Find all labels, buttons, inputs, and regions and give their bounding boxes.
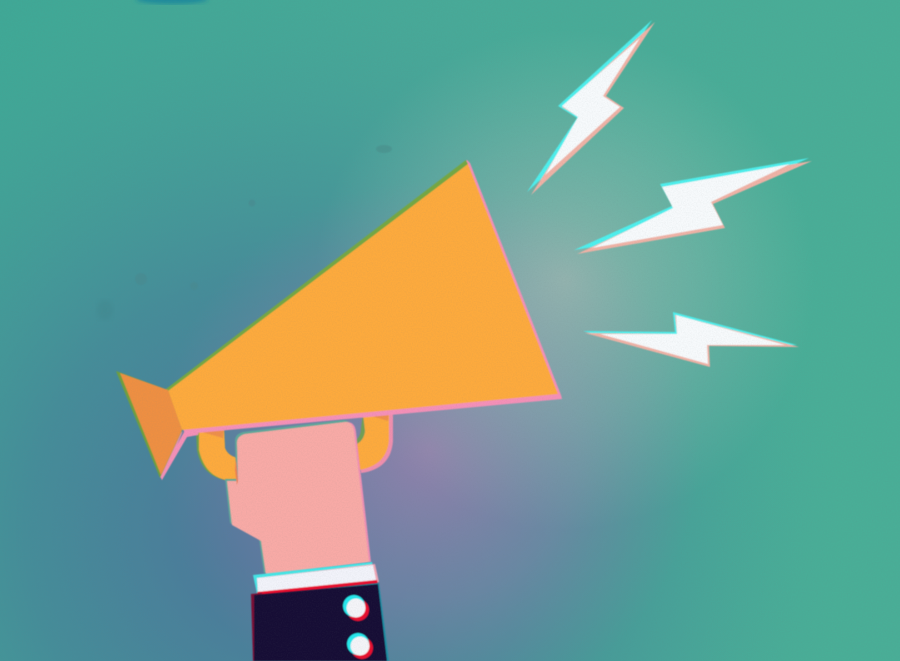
handle: left grip <box>196 427 238 481</box>
lightning bolt: middle <box>574 158 812 254</box>
shirt cuff <box>253 562 379 596</box>
button: lower cuff button <box>347 633 373 659</box>
lightning bolt: bottom <box>583 312 799 367</box>
hand <box>225 420 371 575</box>
megaphone cone <box>166 160 562 434</box>
megaphone mouthpiece <box>116 371 199 480</box>
megaphone <box>116 160 562 481</box>
lightning bolt: top <box>527 20 655 195</box>
jacket sleeve <box>251 583 389 661</box>
button: upper cuff button <box>343 595 369 621</box>
handle: right grip <box>353 410 393 473</box>
